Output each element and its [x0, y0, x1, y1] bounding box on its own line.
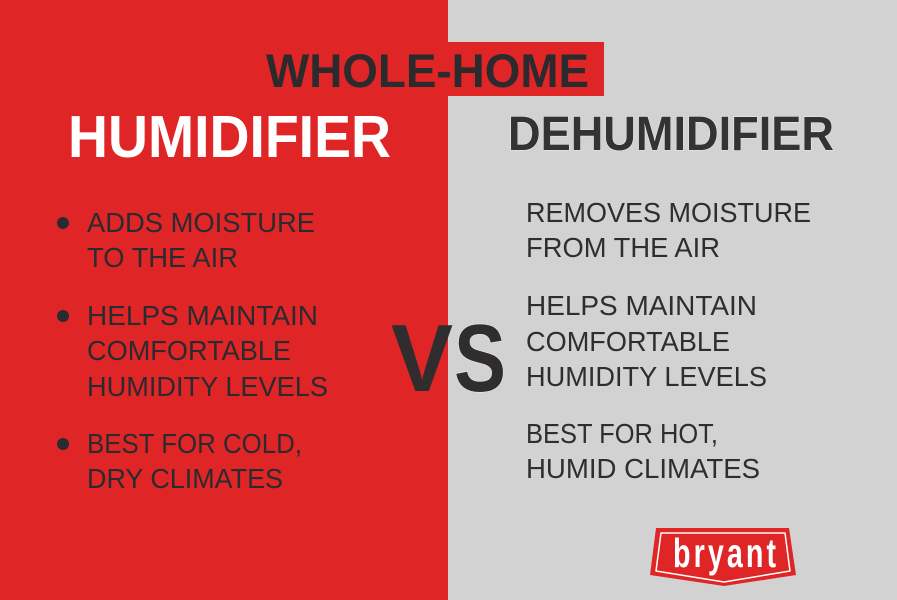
- point: helps maintain: HELPS MAINTAIN: [526, 290, 757, 321]
- bullet: best for cold: BEST FOR COLD,: [87, 428, 302, 459]
- vs label: S: [454, 305, 506, 412]
- bullet: adds moisture: [57, 207, 315, 273]
- point: removes moisture: [526, 197, 811, 263]
- point: best for hot: [526, 418, 760, 484]
- vs label: [391, 305, 506, 412]
- panel: dehumidifier background: [448, 0, 897, 600]
- point: best for hot: HUMID CLIMATES: [526, 453, 760, 484]
- bullet: best for cold: DRY CLIMATES: [87, 463, 283, 494]
- point: best for hot: BEST FOR HOT,: [526, 418, 718, 449]
- logo: bryant: [650, 528, 796, 586]
- point: removes moisture: FROM THE AIR: [526, 232, 720, 263]
- panel: humidifier background: [0, 0, 448, 600]
- list: dehumidifier points: [526, 197, 811, 484]
- bullet: helps maintain: HUMIDITY LEVELS: [87, 371, 328, 402]
- bullet: helps maintain: COMFORTABLE: [87, 335, 291, 366]
- bullet: helps maintain: [57, 300, 328, 402]
- title banner: whole-home: WHOLE-HOME: [266, 44, 589, 97]
- heading: humidifier: HUMIDIFIER: [68, 104, 391, 170]
- list: humidifier points: [57, 207, 328, 494]
- point: helps maintain: HUMIDITY LEVELS: [526, 361, 767, 392]
- point: helps maintain: [526, 290, 767, 392]
- bullet: adds moisture: ADDS MOISTURE: [87, 207, 315, 238]
- vs label: V: [391, 305, 453, 412]
- point: helps maintain: COMFORTABLE: [526, 326, 730, 357]
- bullet: best for cold: [57, 428, 302, 494]
- point: removes moisture: REMOVES MOISTURE: [526, 197, 811, 228]
- logo: bryant: bryant: [673, 531, 779, 576]
- bullet: helps maintain: HELPS MAINTAIN: [87, 300, 318, 331]
- bullet: adds moisture: TO THE AIR: [87, 242, 238, 273]
- heading: dehumidifier: DEHUMIDIFIER: [508, 108, 834, 161]
